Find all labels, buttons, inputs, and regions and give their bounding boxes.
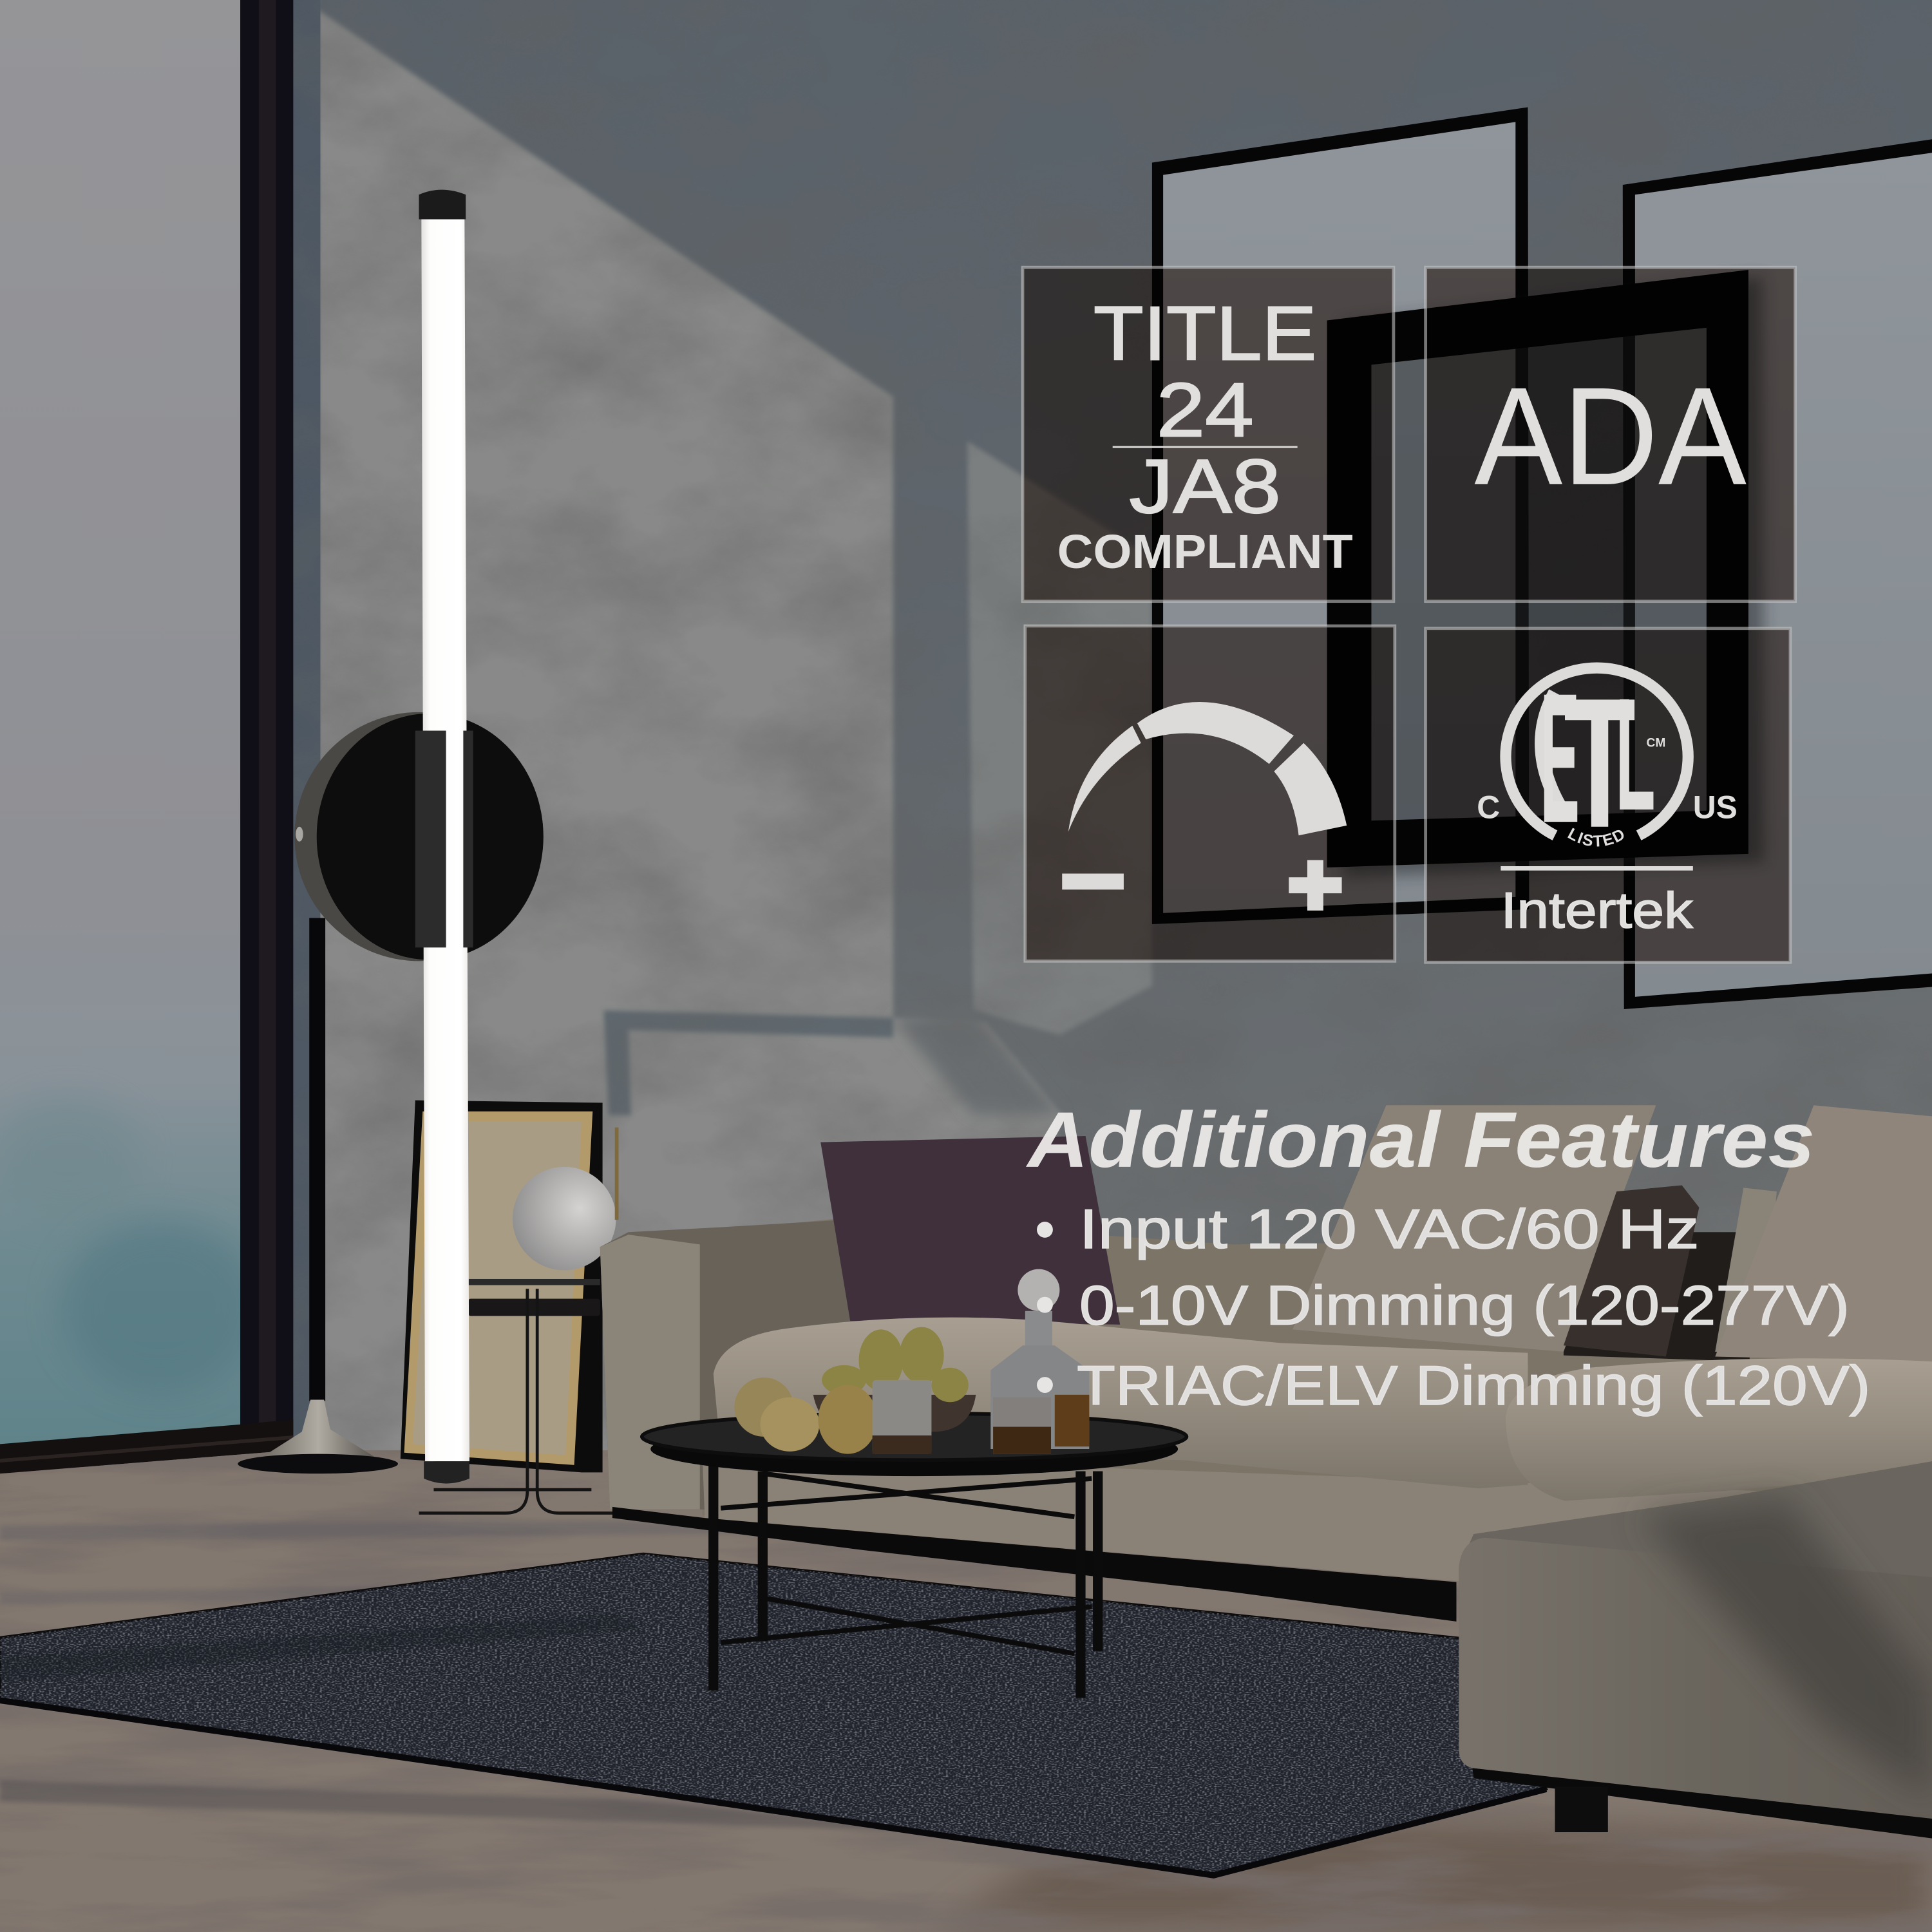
badge panel: ADA	[1426, 267, 1795, 601]
dark wooden frame	[1327, 270, 1765, 877]
ETL letter T: T	[1564, 660, 1636, 867]
chaise section of sofa	[1459, 1461, 1932, 1839]
CM mark: CM	[1647, 736, 1665, 750]
icon: curved spine of the E	[1542, 692, 1567, 818]
icon: ETL ring	[1506, 668, 1688, 835]
lamp bottom cap	[424, 1461, 469, 1484]
Intertek text: Intertek	[1501, 882, 1694, 939]
ADA text: ADA	[1474, 358, 1747, 514]
small pillow	[1715, 1188, 1777, 1356]
background: concrete wall	[293, 0, 1932, 1479]
LISTED text: LISTED	[1567, 828, 1624, 846]
feature: 0-10V dimming: 0-10V Dimming (120-277V)	[1079, 1275, 1850, 1337]
sofa back behind pillows	[703, 1217, 1932, 1515]
picture frame left on wall	[1152, 107, 1529, 924]
right seat cushion	[1506, 1358, 1932, 1501]
left seat cushion	[714, 1318, 1528, 1488]
divider line	[1501, 866, 1693, 871]
badge panel: ETL listed	[1424, 627, 1792, 964]
chaise front	[1459, 1538, 1932, 1819]
JA8 text: JA8	[1130, 444, 1281, 529]
US mark: US	[1693, 789, 1738, 825]
chaise top	[1459, 1461, 1932, 1602]
badge panel: dimming	[1025, 626, 1395, 961]
24 text: 24	[1157, 368, 1254, 453]
wall lamp	[294, 190, 544, 1484]
chaise leg and strip	[1472, 1768, 1932, 1839]
right beige pillow	[1715, 1105, 1932, 1361]
fruit bowl	[813, 1395, 976, 1432]
tray	[642, 1414, 1186, 1476]
side table with globe lamp	[419, 1128, 618, 1513]
feature list	[1037, 1198, 1870, 1417]
icon: dimmer arc	[1068, 702, 1347, 835]
purple pillow	[820, 1136, 1120, 1325]
lamp mount plate	[294, 712, 544, 961]
feature: TRIAC/ELV dimming: TRIAC/ELV Dimming (120V)	[1077, 1355, 1870, 1417]
feature: input voltage: Input 120 VAC/60 Hz	[1079, 1198, 1699, 1260]
floor	[0, 1450, 1932, 1932]
sofa base	[703, 1454, 1932, 1602]
compliant text: COMPLIANT	[1057, 524, 1353, 578]
picture frame right on wall	[1623, 139, 1932, 1009]
sofa base black strip	[612, 1507, 1456, 1622]
lamp upper and lower tube	[421, 217, 469, 1461]
pears	[822, 1327, 969, 1402]
rug	[0, 1546, 1553, 1879]
ETL letter L: L	[1615, 665, 1656, 844]
lamp top cap	[419, 190, 466, 220]
divider line	[1113, 446, 1298, 448]
ETL letter E: E	[1540, 656, 1580, 862]
icon: plus	[1289, 860, 1342, 911]
decanter	[990, 1269, 1089, 1454]
icon: minus	[1062, 874, 1124, 889]
dark pillow	[1564, 1186, 1699, 1357]
heading: Additional Features: Additional Features	[1025, 1095, 1815, 1184]
window frame	[0, 0, 293, 1475]
coffee table	[642, 1269, 1186, 1698]
Title 24 text: TITLE	[1094, 292, 1316, 377]
sofa	[600, 1105, 1932, 1622]
big beige pillow	[1293, 1105, 1656, 1352]
table legs and cross bars	[714, 1465, 1098, 1698]
drinking glass	[873, 1380, 931, 1454]
lamp mount bracket	[415, 731, 473, 947]
badge panel: Title 24 JA8 compliant	[1023, 267, 1394, 601]
pomegranates	[734, 1378, 877, 1454]
floor lamp behind wall lamp	[238, 918, 398, 1473]
left arm	[600, 1220, 862, 1510]
canvas leaning against wall	[401, 1101, 603, 1472]
chaise diagonal shadow	[1639, 1497, 1932, 1799]
C mark: C	[1477, 789, 1500, 825]
window view with misty trees	[0, 0, 259, 1448]
